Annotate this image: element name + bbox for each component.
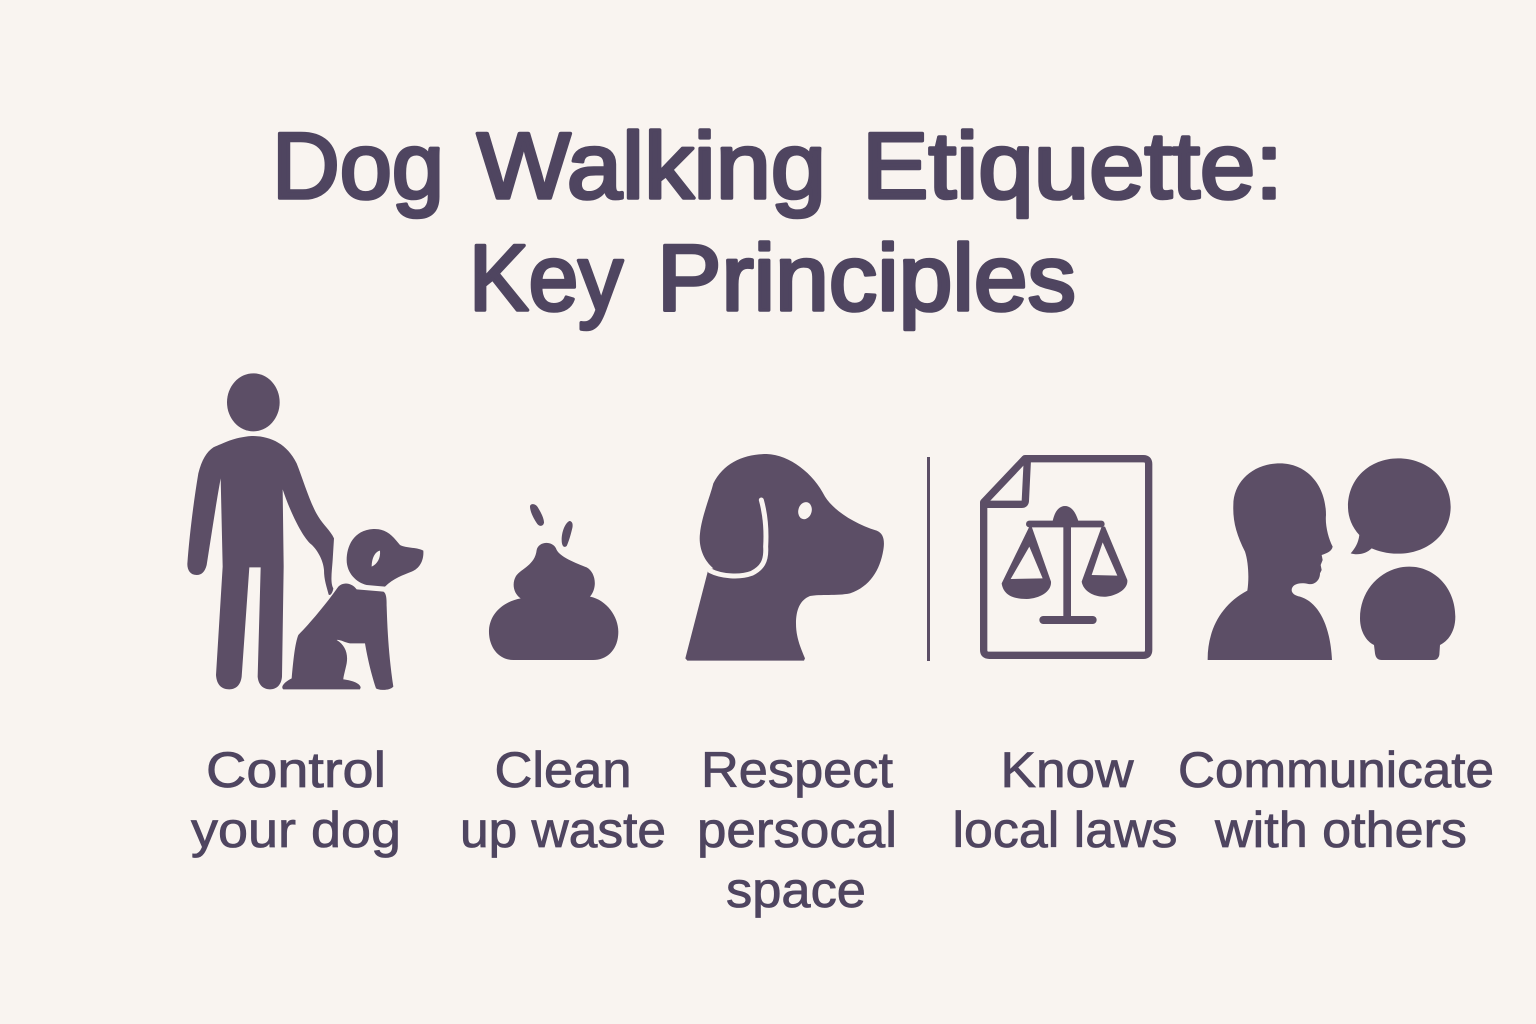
label: control your dog: your dog	[191, 802, 401, 858]
divider line	[927, 457, 930, 661]
label: control your dog: Control	[206, 742, 386, 798]
icon: waste	[489, 504, 618, 660]
title: Principles	[657, 225, 1076, 330]
icon: people communicating	[1208, 458, 1455, 660]
label: clean up waste: Clean	[494, 742, 632, 798]
label: know local laws: Know	[1000, 742, 1134, 798]
label: respect personal space: space	[726, 862, 866, 918]
title: Dog	[272, 113, 444, 218]
label: communicate with others: with others	[1214, 802, 1467, 858]
label: respect personal space: Respect	[701, 742, 893, 798]
title: Key	[469, 225, 623, 330]
label: know local laws	[952, 742, 1178, 858]
icon: dog head	[685, 454, 884, 661]
label: communicate with others: Communicate	[1178, 742, 1494, 798]
title: Walking	[477, 113, 826, 218]
icon: legal document	[984, 459, 1149, 655]
label: control your dog	[191, 742, 401, 858]
label: communicate with others	[1178, 742, 1494, 858]
label: know local laws: local laws	[952, 802, 1178, 858]
title	[272, 113, 1283, 330]
label: respect personal space: persocal	[697, 802, 897, 858]
label: clean up waste	[460, 742, 666, 858]
icon: person with dog	[187, 373, 423, 690]
title: Etiquette:	[862, 113, 1283, 218]
label: respect personal space	[697, 742, 897, 918]
label: clean up waste: up waste	[460, 802, 666, 858]
